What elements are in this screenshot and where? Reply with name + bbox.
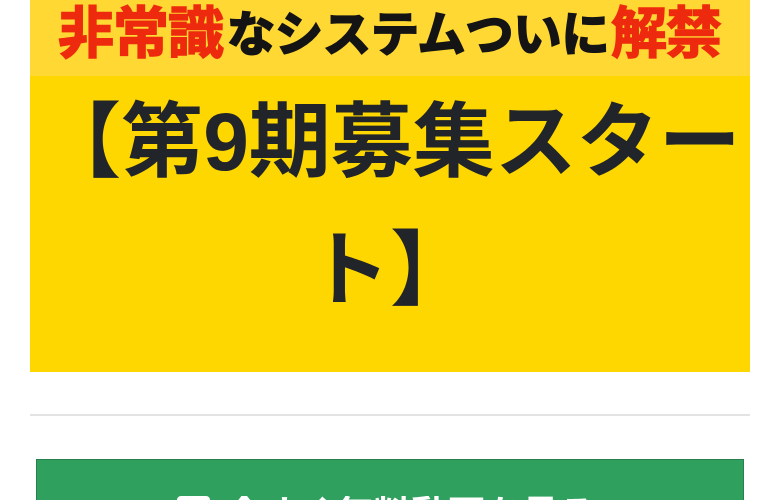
banner text: red closing word: 解禁 [611, 2, 721, 65]
banner text: black middle phrase: なシステムついに [227, 9, 610, 62]
heading: ninth term enrolment start: 【第9期募集スタート】 [39, 97, 741, 316]
banner text: red lead word: 非常識 [58, 2, 223, 65]
banner: top headline strip [30, 0, 750, 76]
icon: video camera [177, 496, 210, 500]
divider [30, 414, 750, 416]
panel: yellow headline block [30, 0, 750, 372]
button: green call to action [36, 459, 744, 500]
